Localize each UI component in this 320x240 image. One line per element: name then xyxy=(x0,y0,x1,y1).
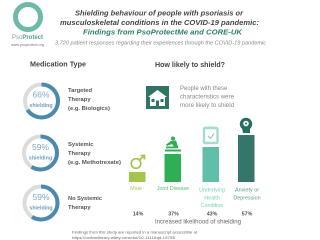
label: no systemic therapy: No Systemic xyxy=(68,196,103,202)
title: Findings from PsoProtectMe and CORE-UK xyxy=(83,28,243,36)
logo: PsoProtect xyxy=(11,4,44,47)
heading: medication type: Medication Type xyxy=(30,62,86,68)
label: targeted therapy: (e.g. Biologics) xyxy=(68,106,110,112)
icon: clipboard xyxy=(204,126,218,143)
label: systemic therapy xyxy=(68,142,121,166)
percentages: 43% xyxy=(207,212,218,218)
icon: male symbol xyxy=(131,156,144,168)
text: characteristics note: People with these xyxy=(180,86,228,92)
donut: no systemic therapy 59%: shielding xyxy=(29,206,53,212)
donut: targeted therapy 66% xyxy=(25,84,58,118)
title: Shielding behaviour of people with psoriasis or xyxy=(75,8,244,18)
label: joint disease: Joint Disease xyxy=(157,186,189,192)
bar: underlying health condition xyxy=(202,147,219,182)
label: no systemic therapy xyxy=(68,196,103,211)
percentages xyxy=(133,212,253,218)
label: male: Male xyxy=(130,186,142,192)
title: musculoskeletal conditions in the COVID-19 pandemic: xyxy=(60,18,259,27)
icon: head with gear xyxy=(240,118,252,133)
label: anxiety or depression: Depression xyxy=(233,196,261,202)
percentages: 14% xyxy=(133,212,144,218)
label: systemic therapy: Therapy xyxy=(68,151,91,157)
donut: systemic therapy 59% xyxy=(24,136,57,170)
donut: systemic therapy 59%: shielding xyxy=(29,156,52,162)
percentages: 57% xyxy=(242,212,253,218)
label: underlying health condition: Condition xyxy=(201,203,223,209)
label: targeted therapy xyxy=(68,88,110,112)
donut: targeted therapy 66%: shielding xyxy=(29,103,53,109)
footer note: Findings from this study are reported in a manuscript accessible at xyxy=(72,230,198,234)
label: targeted therapy: Targeted xyxy=(68,88,93,94)
bar: male xyxy=(129,172,146,182)
text: characteristics note: more likely to shield xyxy=(180,103,234,109)
donut: no systemic therapy 59% xyxy=(24,186,58,220)
footer note xyxy=(72,230,198,240)
label: anxiety or depression: Anxiety or xyxy=(235,188,259,194)
donut: targeted therapy 66%: 66% xyxy=(32,90,50,100)
bar: anxiety or depression xyxy=(238,135,254,182)
logo: PsoProtect: PsoProtect xyxy=(12,35,43,41)
label: systemic therapy: Systemic xyxy=(68,142,94,148)
label: targeted therapy: Therapy xyxy=(68,97,91,103)
text: characteristics note: characteristics were xyxy=(180,94,235,100)
label: systemic therapy: (e.g. Methotrexate) xyxy=(68,160,121,166)
label: no systemic therapy: Therapy xyxy=(68,205,91,211)
icon: house xyxy=(146,86,169,109)
percentages: 37% xyxy=(168,212,179,218)
donut: no systemic therapy 59%: 59% xyxy=(32,192,50,202)
title xyxy=(60,8,259,36)
bar: joint disease xyxy=(164,154,181,182)
label: underlying health condition: Health xyxy=(204,196,220,202)
donut: systemic therapy 59%: 59% xyxy=(32,142,49,152)
heading: how likely to shield: How likely to shield? xyxy=(155,62,225,69)
footer note: https://onlinelibrary.wiley.com/doi/10.1111/bjd.19755 xyxy=(72,235,176,240)
label: anxiety or depression xyxy=(233,188,261,202)
subtitle: 3,720 patient responses regarding their experiences through the COVID-19 pandemic xyxy=(55,40,266,46)
icon: joint disease massage xyxy=(165,136,181,152)
label: underlying health condition xyxy=(199,188,225,209)
label: underlying health condition: Underlying xyxy=(199,188,225,194)
axis caption: Increased likelihood of shielding xyxy=(155,218,241,226)
text: characteristics note xyxy=(180,86,235,109)
logo: PsoProtect: www.psoprotect.org xyxy=(11,43,44,47)
